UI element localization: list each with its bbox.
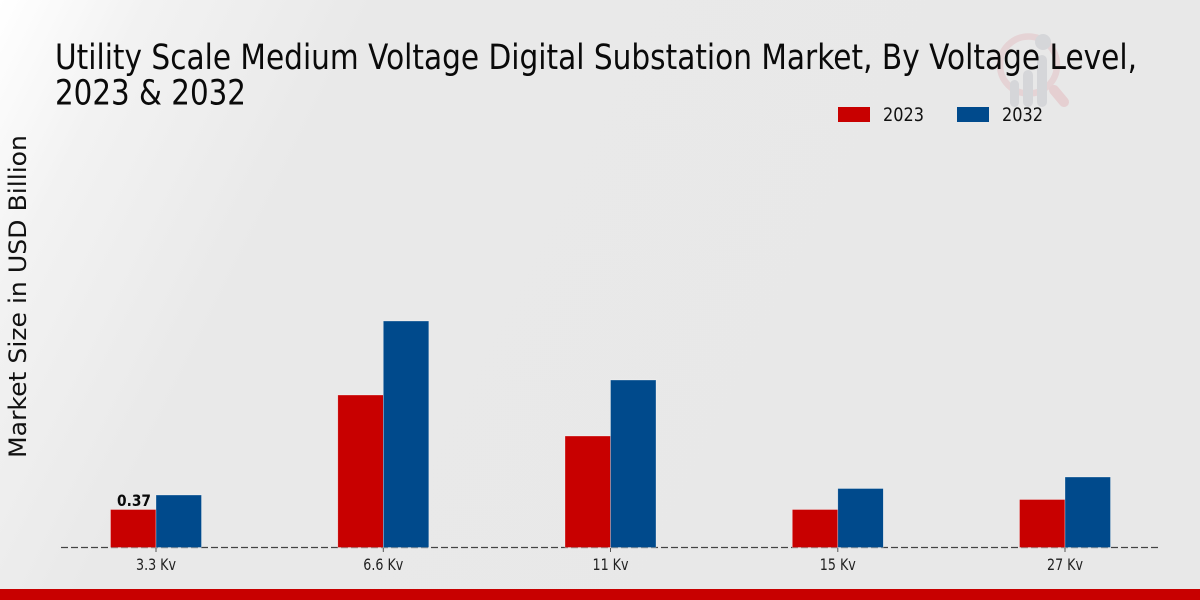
data label: 0.37: 0.37 xyxy=(117,491,151,510)
group: 27 Kv xyxy=(1020,477,1110,574)
group: 11 Kv xyxy=(565,380,656,574)
group: 15 Kv xyxy=(792,488,883,574)
legend item: 2023 xyxy=(838,104,924,126)
group: 3.3 Kv: 3.3 Kv xyxy=(136,555,176,574)
baseline axis xyxy=(61,546,1160,548)
watermark logo xyxy=(1000,34,1064,107)
footer bar xyxy=(0,589,1200,600)
group: 27 Kv: 27 Kv xyxy=(1047,555,1083,574)
group: 11 Kv: 11 Kv xyxy=(592,555,628,574)
legend item: 2023: 2023 xyxy=(883,104,924,126)
title line two: 2023 & 2032 xyxy=(55,74,246,114)
group: 3.3 Kv xyxy=(110,495,202,574)
legend item: 2032: 2032 xyxy=(1002,104,1043,126)
legend xyxy=(838,104,1043,126)
y axis label: Market Size in USD Billion xyxy=(4,135,32,458)
legend item: 2032 xyxy=(957,104,1043,126)
group: 15 Kv: 15 Kv xyxy=(820,555,856,574)
bar chart xyxy=(110,321,1110,574)
group: 6.6 Kv: 6.6 Kv xyxy=(363,555,403,574)
group: 6.6 Kv xyxy=(338,321,429,574)
